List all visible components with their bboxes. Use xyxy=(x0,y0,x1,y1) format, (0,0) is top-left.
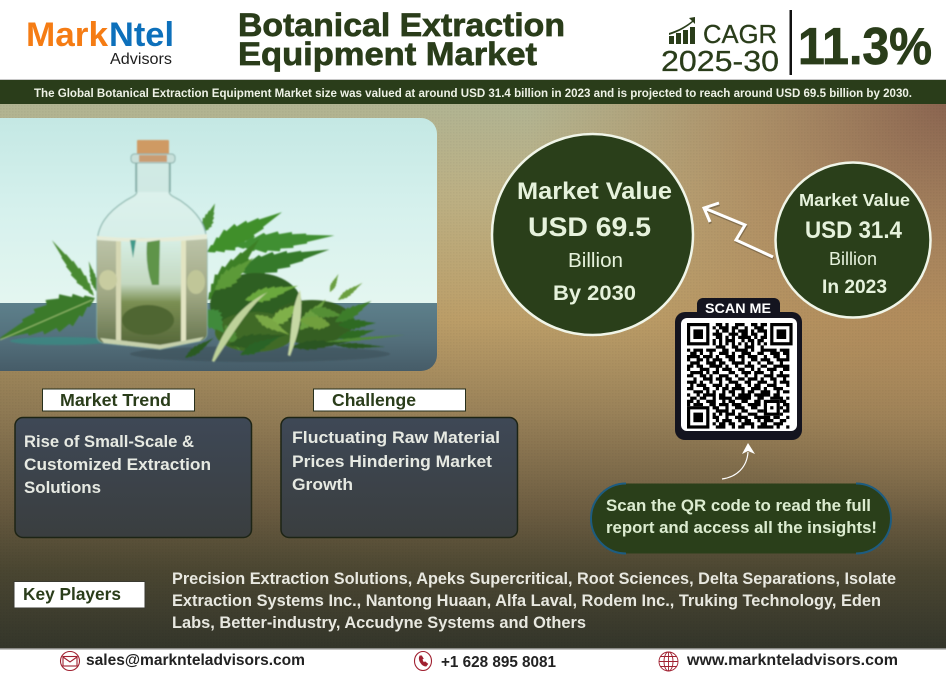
logo: MarkNtel Advisors xyxy=(26,16,174,68)
header background xyxy=(0,0,946,80)
panel: challenge xyxy=(281,418,518,538)
footer: phone: +1 628 895 8081 xyxy=(441,654,556,671)
label: key players xyxy=(14,582,145,608)
market value 2030 circle xyxy=(492,134,693,335)
arrow: points to QR code xyxy=(722,443,755,479)
callout: scan the QR code xyxy=(590,484,892,554)
icon: phone xyxy=(414,652,432,670)
upper right leaves xyxy=(201,203,216,232)
callout: scan the QR code: report and access all the insights! xyxy=(606,518,877,537)
market value 2030 circle: Market Value xyxy=(517,178,672,205)
footer: phone xyxy=(414,652,556,671)
panel: challenge: Growth xyxy=(292,475,353,494)
bottle xyxy=(97,162,207,349)
CAGR block: 2025-30 xyxy=(661,46,779,78)
cork xyxy=(137,140,169,156)
market value 2023 circle: Billion xyxy=(829,249,877,269)
market value 2030 circle: Billion xyxy=(568,250,623,272)
text: key players list xyxy=(172,570,896,632)
logo: MarkNtel Advisors: Ntel xyxy=(109,16,174,54)
footer: email: sales@marknteladvisors.com xyxy=(86,652,305,669)
QR modules xyxy=(687,325,791,427)
left leaves xyxy=(0,293,96,340)
centre cluster xyxy=(209,272,302,315)
icon: globe xyxy=(659,652,678,671)
market value 2023 circle: USD 31.4 xyxy=(805,217,903,244)
CAGR block: 11.3% xyxy=(798,18,932,76)
icon: growth chart xyxy=(669,17,695,44)
arrow: growth from 2023 to 2030 xyxy=(704,203,774,259)
market value 2030 circle: USD 69.5 xyxy=(528,212,651,242)
panel: market trend: Rise of Small-Scale & xyxy=(24,432,194,451)
market value 2023 circle: Market Value xyxy=(799,190,910,210)
QR code card xyxy=(675,298,802,440)
summary banner xyxy=(0,79,946,104)
footer bar xyxy=(0,648,946,674)
title: Botanical Extraction xyxy=(238,7,565,43)
text: key players list: Extraction Systems Inc., Nantong Huaan, Alfa Laval, Rodem Inc., Truking Technology, Eden xyxy=(172,592,881,610)
callout: scan the QR code: Scan the QR code to read the full xyxy=(606,496,871,515)
panel: challenge: Prices Hindering Market xyxy=(292,452,492,471)
panel: market trend: Solutions xyxy=(24,478,101,497)
market value 2023 circle: In 2023 xyxy=(822,277,887,298)
label: challenge xyxy=(314,389,466,411)
text: key players list: Precision Extraction Solutions, Apeks Supercritical, Root Sciences, Delta Separations, Isolate xyxy=(172,570,896,588)
label: challenge: Challenge xyxy=(332,390,416,410)
lower right leaves xyxy=(335,300,372,322)
icon: mail xyxy=(60,652,80,670)
text: key players list: Labs, Better-industry, Accudyne Systems and Others xyxy=(172,614,586,632)
panel: market trend: Customized Extraction xyxy=(24,455,211,474)
label: key players: Key Players xyxy=(23,584,121,604)
CAGR block xyxy=(661,10,932,78)
QR code card: SCAN ME xyxy=(705,300,771,316)
pale leaves xyxy=(212,292,268,362)
title xyxy=(238,7,565,72)
market value 2030 circle: By 2030 xyxy=(553,282,636,305)
CAGR block: CAGR xyxy=(703,19,777,49)
panel: market trend xyxy=(15,418,252,538)
label: market trend: Market Trend xyxy=(60,390,171,410)
market value 2023 circle xyxy=(776,162,930,318)
title: Equipment Market xyxy=(238,36,537,72)
footer: website: www.marknteladvisors.com xyxy=(686,652,898,669)
label: market trend xyxy=(42,389,194,411)
panel: challenge: Fluctuating Raw Material xyxy=(292,428,500,447)
logo: MarkNtel Advisors: Advisors xyxy=(110,51,172,68)
photo: glass bottle with botanical leaves xyxy=(0,118,437,371)
logo: MarkNtel Advisors: Mark xyxy=(26,16,108,54)
